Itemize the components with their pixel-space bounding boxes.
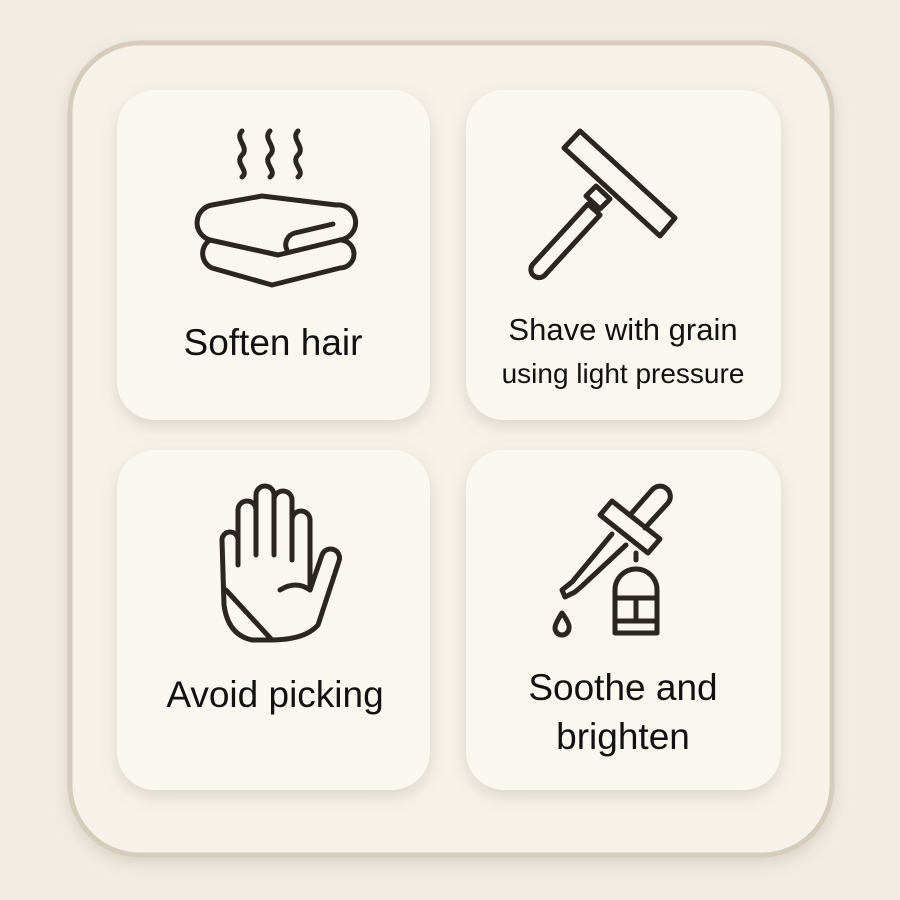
outer panel [70, 43, 832, 855]
icon: warm towel [197, 131, 356, 285]
label: Soften hair [184, 322, 362, 363]
card: shave with grain: using light pressure [502, 358, 744, 389]
card: shave with grain [466, 90, 781, 420]
label: Shave with grain [508, 312, 738, 347]
card: soothe and brighten: brighten [556, 716, 690, 757]
icon: dropper [555, 486, 670, 635]
label: Soothe and [528, 667, 718, 708]
label: Avoid picking [166, 674, 384, 715]
card: avoid picking [117, 450, 430, 790]
icon: razor [531, 131, 675, 278]
card: soften hair [117, 90, 430, 420]
icon: hand [222, 486, 340, 640]
card: soothe and brighten [466, 450, 781, 790]
